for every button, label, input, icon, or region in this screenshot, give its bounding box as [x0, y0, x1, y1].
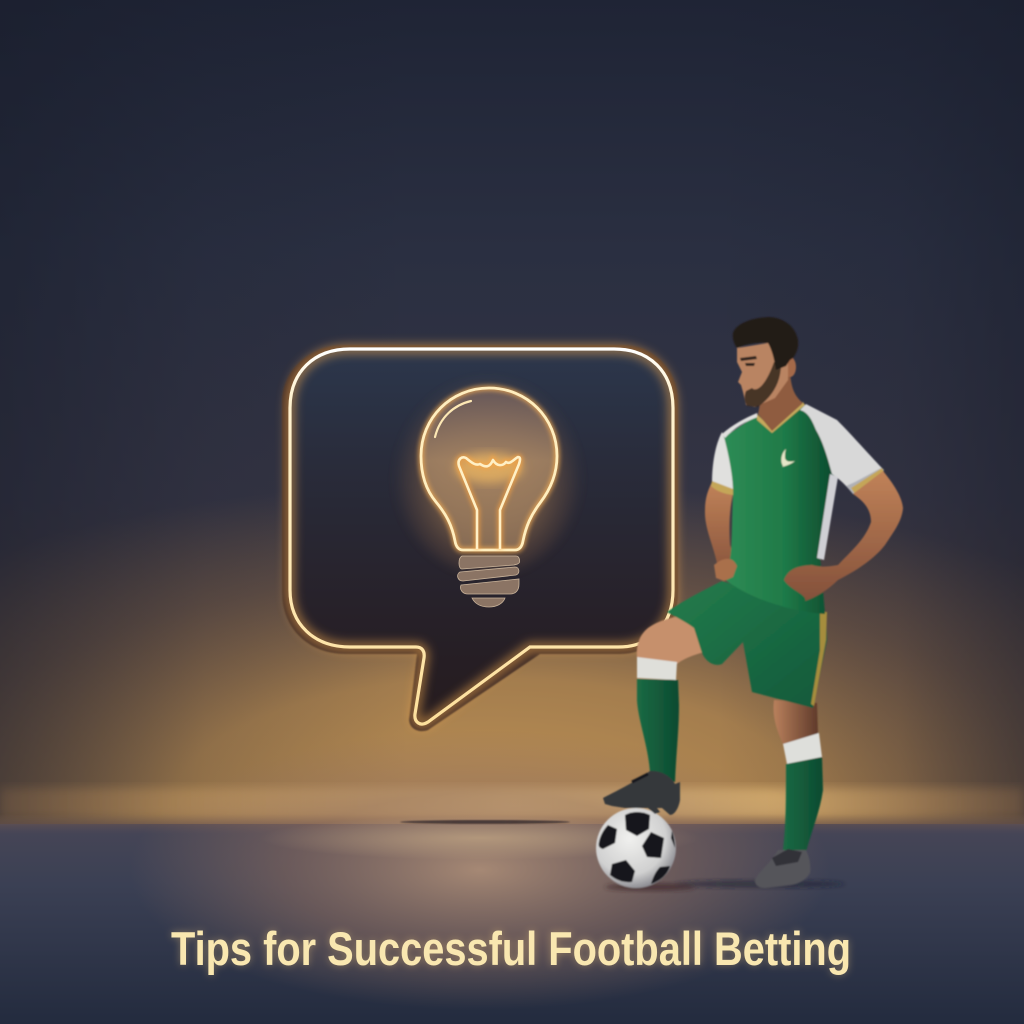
beard	[745, 362, 781, 407]
bulb outline glow	[421, 388, 557, 550]
neon outline glow	[290, 349, 673, 724]
floor	[0, 730, 1024, 1024]
boot	[755, 850, 810, 888]
title	[171, 922, 851, 975]
speech bubble with neon outline	[282, 345, 678, 731]
top edge cool glow	[335, 342, 625, 352]
green body	[723, 405, 834, 614]
filament glow line	[459, 457, 520, 549]
left shoulder trim	[722, 413, 758, 438]
gold collar	[757, 402, 805, 433]
bubble shadow rim	[282, 345, 678, 731]
neon outline	[290, 349, 673, 724]
horizon glow band	[0, 788, 1024, 818]
neck	[758, 372, 803, 431]
sleeve shade	[846, 468, 884, 494]
side white panel	[817, 474, 838, 560]
filament	[459, 457, 520, 549]
far arm and hand on hip	[784, 471, 903, 601]
soccer ball	[596, 808, 676, 888]
chest crest	[781, 449, 795, 467]
bulb glass fill	[421, 388, 557, 550]
green sock	[637, 679, 679, 782]
near arm and hand	[705, 482, 736, 581]
right white raglan sleeve	[800, 404, 884, 494]
right sleeve gold cuff	[851, 468, 884, 494]
glass highlight	[435, 401, 471, 437]
bulb glow	[393, 365, 583, 575]
left sleeve gold cuff	[711, 481, 733, 495]
bubble panel	[290, 349, 673, 724]
raised leg	[603, 612, 722, 815]
left white sleeve	[712, 432, 733, 492]
shorts gold stripe	[811, 612, 827, 706]
filament glow	[455, 453, 523, 483]
thigh and knee skin	[637, 612, 722, 664]
near hand fingers	[714, 559, 737, 581]
face	[737, 343, 788, 407]
boot on ball	[603, 771, 680, 815]
title text: Tips for Successful Football Betting	[171, 922, 851, 975]
jersey	[711, 402, 884, 614]
white sock band	[783, 733, 822, 764]
shorts	[667, 581, 827, 708]
eye and brow	[740, 356, 757, 366]
standing leg	[755, 700, 823, 888]
ear	[784, 357, 796, 377]
bulb screw base	[458, 556, 520, 607]
icon: light bulb	[393, 365, 583, 607]
bulb outline	[421, 388, 557, 550]
white sock band	[637, 657, 677, 680]
green sock	[783, 757, 823, 852]
hair	[733, 317, 798, 370]
floor shadow	[675, 880, 845, 888]
title glow: Tips for Successful Football Betting	[171, 922, 851, 975]
player figure	[596, 317, 903, 891]
lower thigh skin	[773, 700, 818, 746]
